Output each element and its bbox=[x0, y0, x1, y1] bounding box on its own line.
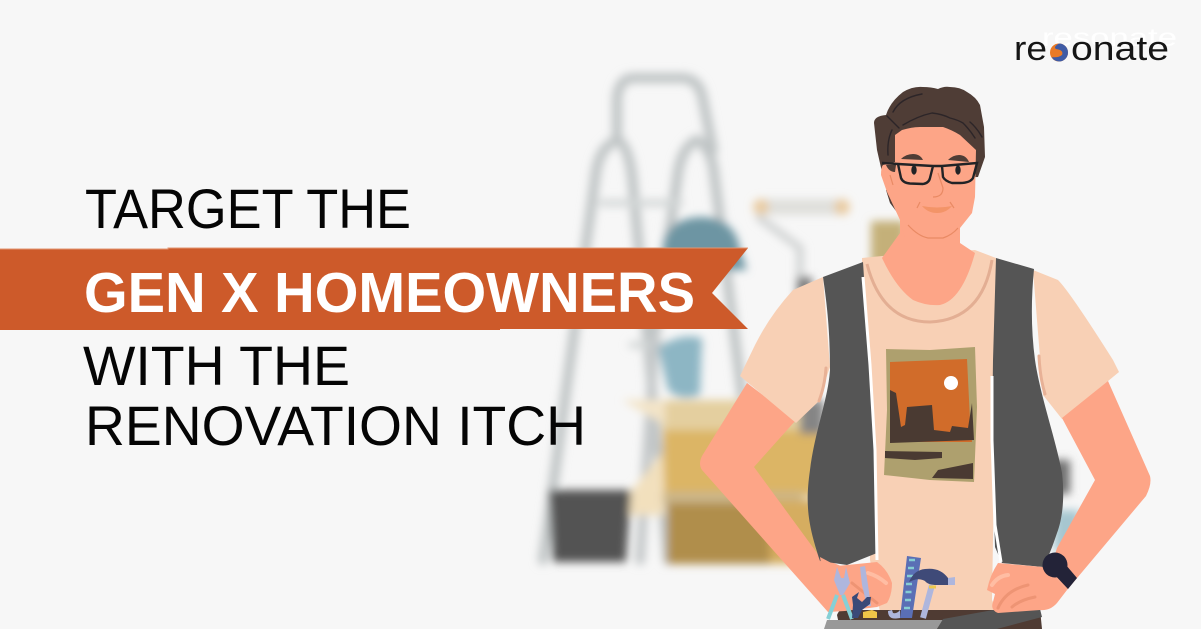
tool: wrench bbox=[852, 592, 871, 618]
tool: tape bbox=[863, 610, 877, 618]
belt bbox=[837, 607, 1042, 629]
vest left panel bbox=[808, 262, 877, 565]
heading line: WITH THE: WITH THE bbox=[83, 334, 350, 397]
left sleeve bbox=[740, 277, 830, 423]
glasses bbox=[882, 163, 977, 184]
left arm bbox=[700, 383, 850, 612]
hair bbox=[874, 87, 985, 180]
right sleeve bbox=[1033, 270, 1119, 419]
icon: logo swirl bbox=[1050, 44, 1068, 62]
eyebrows bbox=[901, 154, 969, 162]
vest white trim bbox=[863, 277, 1001, 562]
logo: resonate: re bbox=[1014, 30, 1047, 68]
nose, cheeks and chin lines bbox=[890, 173, 958, 238]
cardboard boxes bbox=[662, 400, 817, 430]
paint bucket, blue bbox=[663, 217, 747, 270]
shirt print bbox=[884, 347, 977, 482]
tool: small wrench bbox=[888, 610, 900, 619]
banner text: GEN X HOMEOWNERS bbox=[84, 261, 695, 325]
tool: screwdriver bbox=[860, 566, 871, 606]
logo: resonate bbox=[1014, 24, 1177, 68]
logo: resonate: onate bbox=[1071, 30, 1169, 68]
shirt collar line bbox=[867, 260, 992, 322]
tool: ruler bbox=[900, 556, 921, 618]
back of hair under ear bbox=[886, 186, 899, 215]
face bbox=[881, 127, 976, 238]
blurred items at right bbox=[1050, 460, 1070, 494]
hair strands bbox=[887, 94, 982, 155]
blurred background: renovation supplies bbox=[543, 78, 1080, 564]
ladder bbox=[543, 78, 742, 560]
hand highlights bbox=[868, 573, 1008, 585]
tool: hammer bbox=[909, 569, 955, 618]
finger lines bbox=[852, 583, 1035, 608]
heading line: TARGET THE: TARGET THE bbox=[85, 177, 411, 240]
paint roller bbox=[753, 199, 850, 307]
bucket, dark bbox=[549, 490, 631, 562]
illustration: man with tool belt bbox=[700, 87, 1150, 629]
heading line: RENOVATION ITCH: RENOVATION ITCH bbox=[85, 394, 586, 457]
rag, light blue bbox=[658, 336, 702, 398]
vest right panel bbox=[992, 258, 1063, 567]
box behind head bbox=[871, 221, 905, 265]
left hand bbox=[820, 557, 892, 612]
neck and chest bbox=[882, 215, 975, 305]
right forearm bbox=[1050, 381, 1150, 590]
shirt torso bbox=[862, 250, 998, 612]
tool pouch bbox=[824, 609, 1042, 629]
hair patch at temple bbox=[886, 165, 896, 172]
sleeve creases bbox=[819, 356, 1045, 401]
right hand bbox=[987, 563, 1067, 613]
watch bbox=[1042, 552, 1077, 589]
banner ribbon bbox=[0, 248, 748, 330]
eyes bbox=[911, 165, 917, 175]
mouth bbox=[922, 206, 952, 213]
tool: pliers bbox=[828, 567, 852, 619]
logo: resonate: resonate bbox=[1042, 24, 1177, 52]
